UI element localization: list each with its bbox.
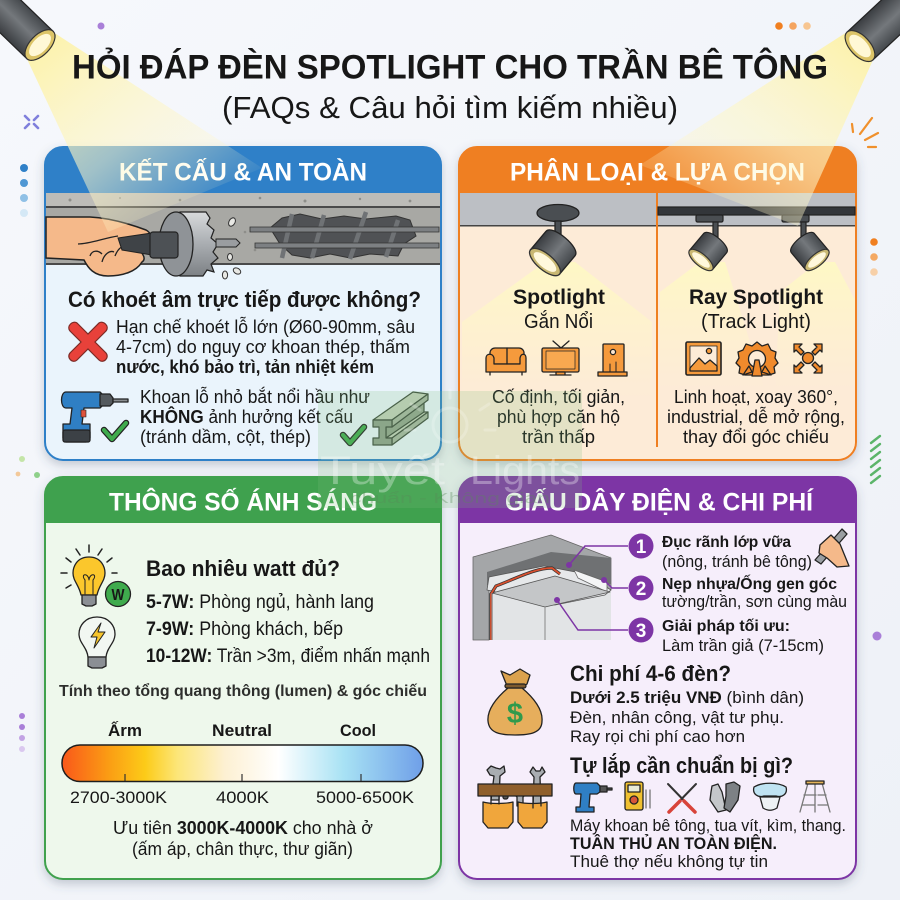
watermark (318, 390, 582, 508)
cost text: Ray rọi chi phí cao hơn (570, 727, 745, 746)
label: spotlight (513, 286, 605, 333)
lamp left (0, 0, 60, 66)
illustration: drilling concrete with rebar (46, 193, 440, 279)
icon: screwdrivers (668, 784, 696, 812)
step text 2: tường/trần, sơn cùng màu (662, 593, 847, 611)
repair text: Thuê thợ nếu không tự tin (570, 853, 768, 871)
repair text (570, 817, 846, 871)
icon: red cross (69, 322, 107, 361)
heading: phân loại: PHÂN LOẠI & LỰA CHỌN (510, 156, 805, 186)
step connectors (557, 546, 628, 630)
watt list: 7-9W: Phòng khách, bếp (146, 619, 343, 640)
step badge 1: 1 (636, 537, 647, 558)
text: spotlight description (492, 386, 625, 447)
icon: multimeter (625, 782, 650, 810)
connector dots (554, 562, 607, 603)
question: Có khoét âm trực tiếp được không? (68, 287, 421, 312)
step text 1 (662, 534, 812, 571)
icon: drill small (574, 783, 612, 812)
step text 3: Làm trần giả (7-15cm) (662, 637, 824, 655)
color temperature labels (108, 721, 376, 740)
icon: sofa (486, 348, 526, 375)
icon: steel beam (373, 392, 428, 445)
recommendation (113, 818, 373, 859)
icon: gloves (710, 782, 740, 812)
icon: gear with hand (736, 342, 778, 376)
color temperature values: 2700-3000K (70, 788, 168, 807)
heading: giấu dây: GIẤU DÂY ĐIỆN & CHI PHÍ (505, 486, 814, 516)
icon: bolt bulb (79, 617, 115, 668)
label: ray spotlight: (Track Light) (701, 311, 811, 333)
recommendation: (ấm áp, chân thực, thư giãn) (132, 839, 353, 859)
repair heading: Tự lắp cần chuẩn bị gì? (570, 753, 793, 778)
step text 3 (662, 618, 824, 655)
color temperature values: 4000K (216, 788, 270, 807)
label: spotlight: Spotlight (513, 286, 605, 309)
color temperature values: 5000-6500K (316, 788, 415, 807)
watermark: chuẩn - Không gian (350, 490, 550, 507)
icon: check mark beam (343, 427, 364, 443)
title: HỎI ĐÁP ĐÈN SPOTLIGHT CHO TRẦN BÊ TÔNG (72, 48, 828, 86)
cost heading: Chi phí 4-6 đèn? (570, 661, 731, 686)
text: spotlight description: trần thấp (522, 426, 595, 447)
text: warning: Hạn chế khoét lỗ lớn (Ø60-90mm, sâu (116, 316, 415, 337)
step text 1: Đục rãnh lớp vữa (662, 534, 791, 551)
text: ray description: industrial, dễ mở rộng, (667, 406, 845, 427)
text: ray description: Linh hoạt, xoay 360°, (674, 386, 838, 407)
color temperature labels: Ấrm (108, 721, 142, 740)
subtitle: (FAQs & Câu hỏi tìm kiếm nhiều) (222, 90, 678, 125)
illustration: ceiling corner wiring (473, 535, 611, 640)
text: small hole: KHÔNG ảnh hưởng kết cấu (140, 406, 353, 427)
step badge 2 (628, 576, 654, 600)
text: spotlight description: phù hợp căn hộ (497, 406, 620, 427)
color temperature labels: Cool (340, 721, 376, 740)
icon: tv (542, 341, 579, 375)
cost text: Đèn, nhân công, vật tư phụ. (570, 708, 784, 727)
lamp right (840, 0, 900, 67)
icon: money bag (488, 669, 542, 735)
heading: thông số: THÔNG SỐ ÁNH SÁNG (109, 486, 377, 516)
watt list: 10-12W: Trần >3m, điểm nhấn mạnh (146, 646, 430, 667)
icon: check mark (104, 423, 126, 439)
text: spotlight description: Cố định, tối giản, (492, 386, 625, 407)
text: ray description (667, 386, 845, 447)
text: warning (116, 316, 415, 377)
recommendation: Ưu tiên 3000K-4000K cho nhà ở (113, 818, 373, 838)
watt list: 5-7W: Phòng ngủ, hành lang (146, 592, 374, 613)
panel: giấu dây điện & chi phí (459, 477, 856, 879)
watt list (146, 592, 430, 667)
icon: ladder (800, 781, 830, 812)
icon: goggles and mask (754, 783, 786, 810)
text: ray description: thay đổi góc chiếu (683, 426, 829, 447)
decorative dots and marks (16, 22, 882, 752)
icon: drill (62, 392, 128, 442)
icon: money bag: $ (507, 698, 523, 730)
icon: surface spotlight (525, 204, 580, 280)
text: small hole: Khoan lỗ nhỏ bắt nổi hầu như (140, 386, 370, 407)
color temperature bar (62, 745, 423, 782)
panel: phân loại & lựa chọn (459, 147, 856, 460)
text: warning: 4-7cm) do nguy cơ khoan thép, thấm (116, 336, 410, 357)
cost text: Dưới 2.5 triệu VNĐ (bình dân) (570, 688, 804, 707)
icon: yellow bulb with W: W (112, 587, 125, 604)
label: ray spotlight: Ray Spotlight (689, 286, 823, 309)
label: ray spotlight (689, 286, 823, 333)
color temperature values (70, 788, 415, 807)
text: small hole (140, 386, 370, 447)
cost text (570, 688, 804, 746)
step text 1: (nông, tránh bê tông) (662, 553, 812, 571)
watermark: Tuyết (320, 449, 445, 493)
panel: thông số ánh sáng (45, 477, 441, 879)
heading: kết cấu: KẾT CẤU & AN TOÀN (119, 158, 367, 186)
light cones (462, 262, 855, 400)
repair text: Máy khoan bê tông, tua vít, kìm, thang. (570, 817, 846, 835)
spotlight beam left (27, 32, 262, 232)
text: small hole: (tránh dầm, cột, thép) (140, 426, 311, 447)
step text 2: Nẹp nhựa/Ống gen góc (662, 573, 837, 593)
panel: kết cấu & an toàn (45, 147, 441, 460)
step badge 3: 3 (636, 621, 646, 642)
lumen note: Tính theo tổng quang thông (lumen) & góc chiếu (59, 682, 427, 700)
color temperature labels: Neutral (212, 721, 272, 740)
icon: yellow bulb with W (61, 545, 130, 606)
repair text: TUÂN THỦ AN TOÀN ĐIỆN. (570, 834, 777, 853)
icon: chisel hand (815, 529, 849, 567)
watermark: Lights (470, 449, 580, 493)
divider (656, 193, 658, 447)
heading: watt: Bao nhiêu watt đủ? (146, 556, 340, 581)
step text 2 (662, 573, 847, 611)
step text 3: Giải pháp tối ưu: (662, 618, 790, 635)
icon: track rail with two spots (658, 207, 855, 274)
ceiling band (460, 193, 855, 226)
icon: expand arrows (794, 344, 822, 373)
label: spotlight: Gắn Nổi (524, 310, 593, 333)
step badge 1 (628, 534, 654, 558)
text: warning: nước, khó bảo trì, tản nhiệt kém (116, 356, 374, 377)
step badge 3 (628, 618, 654, 642)
icon: picture (686, 342, 721, 375)
spotlight beam right (640, 32, 873, 226)
icon: door and plant (598, 344, 627, 376)
step badge 2: 2 (636, 579, 646, 600)
icon: tool belt (478, 766, 552, 828)
